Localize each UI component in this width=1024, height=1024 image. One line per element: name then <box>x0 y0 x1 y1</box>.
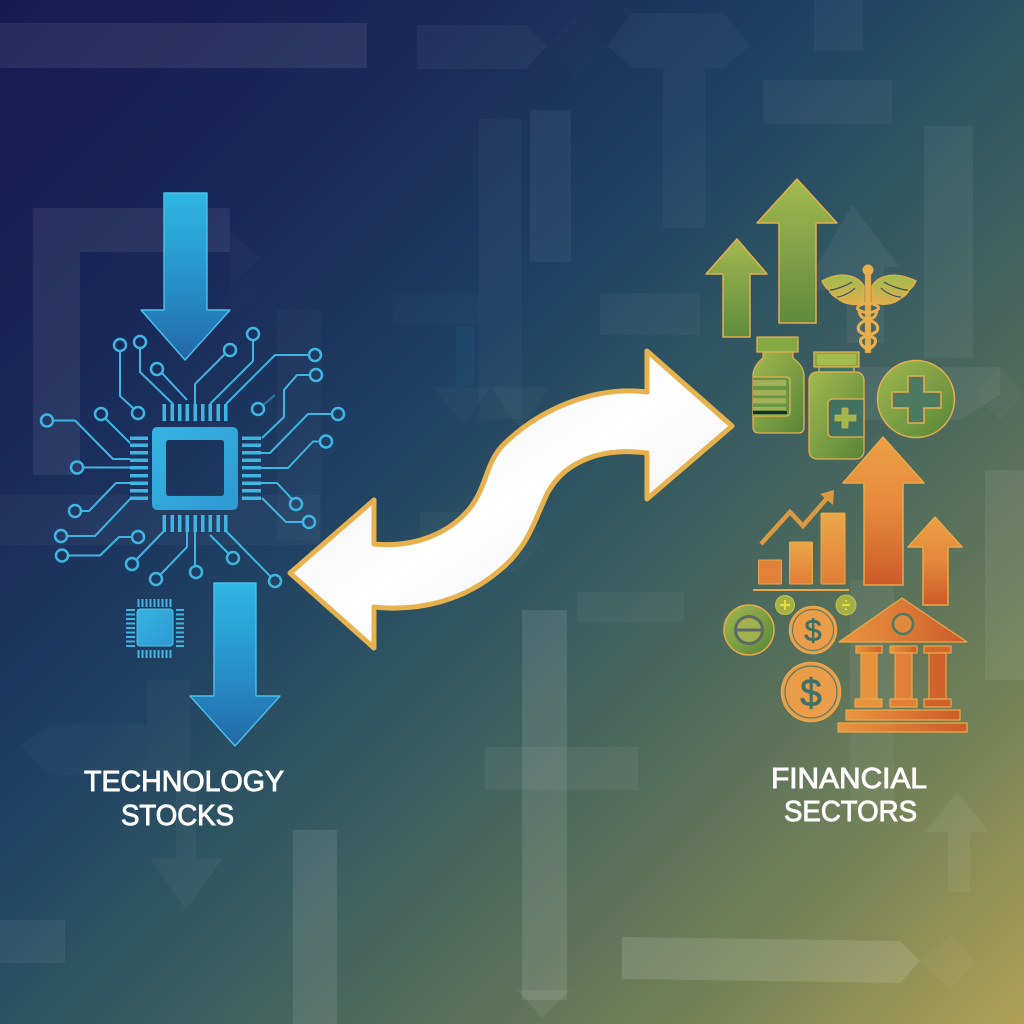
arrow: technology top down <box>141 193 230 360</box>
circuit nodes <box>41 328 344 587</box>
icon: dollar coin upper: $ <box>804 613 822 648</box>
arrow: healthcare small up <box>706 239 767 337</box>
bar chart with trend arrow <box>753 490 849 590</box>
arrow: two-way white curved arrow <box>290 351 732 648</box>
icon: small plus and divide badges <box>776 595 856 615</box>
icon: dollar coin lower <box>782 662 840 722</box>
icon: green minus coin <box>724 605 774 655</box>
circuit traces <box>53 340 332 577</box>
icon: dollar coin lower: $ <box>800 672 822 715</box>
arrow: finance small up <box>908 517 962 605</box>
icon: circuit chip <box>41 328 344 587</box>
label: financial sectors: SECTORS <box>784 796 917 828</box>
icon: pill bottle left <box>753 337 804 433</box>
icon: medical cross circle <box>878 360 954 438</box>
arrow: finance large up <box>843 437 924 585</box>
icon: medicine bottle right <box>809 352 864 459</box>
label: technology stocks: STOCKS <box>121 800 234 832</box>
label: financial sectors: FINANCIAL <box>771 763 927 795</box>
chip pins <box>130 404 261 532</box>
icon: caduceus <box>822 264 916 353</box>
chip body <box>152 427 238 510</box>
icon: bank building <box>838 598 967 732</box>
arrow: healthcare large up <box>757 179 837 323</box>
label: technology stocks: TECHNOLOGY <box>84 766 284 798</box>
arrow: technology bottom down <box>190 583 280 746</box>
label: technology stocks <box>84 766 284 832</box>
label: financial sectors <box>771 763 927 828</box>
icon: small chip <box>126 599 184 658</box>
icon: dollar coin upper <box>790 606 836 654</box>
